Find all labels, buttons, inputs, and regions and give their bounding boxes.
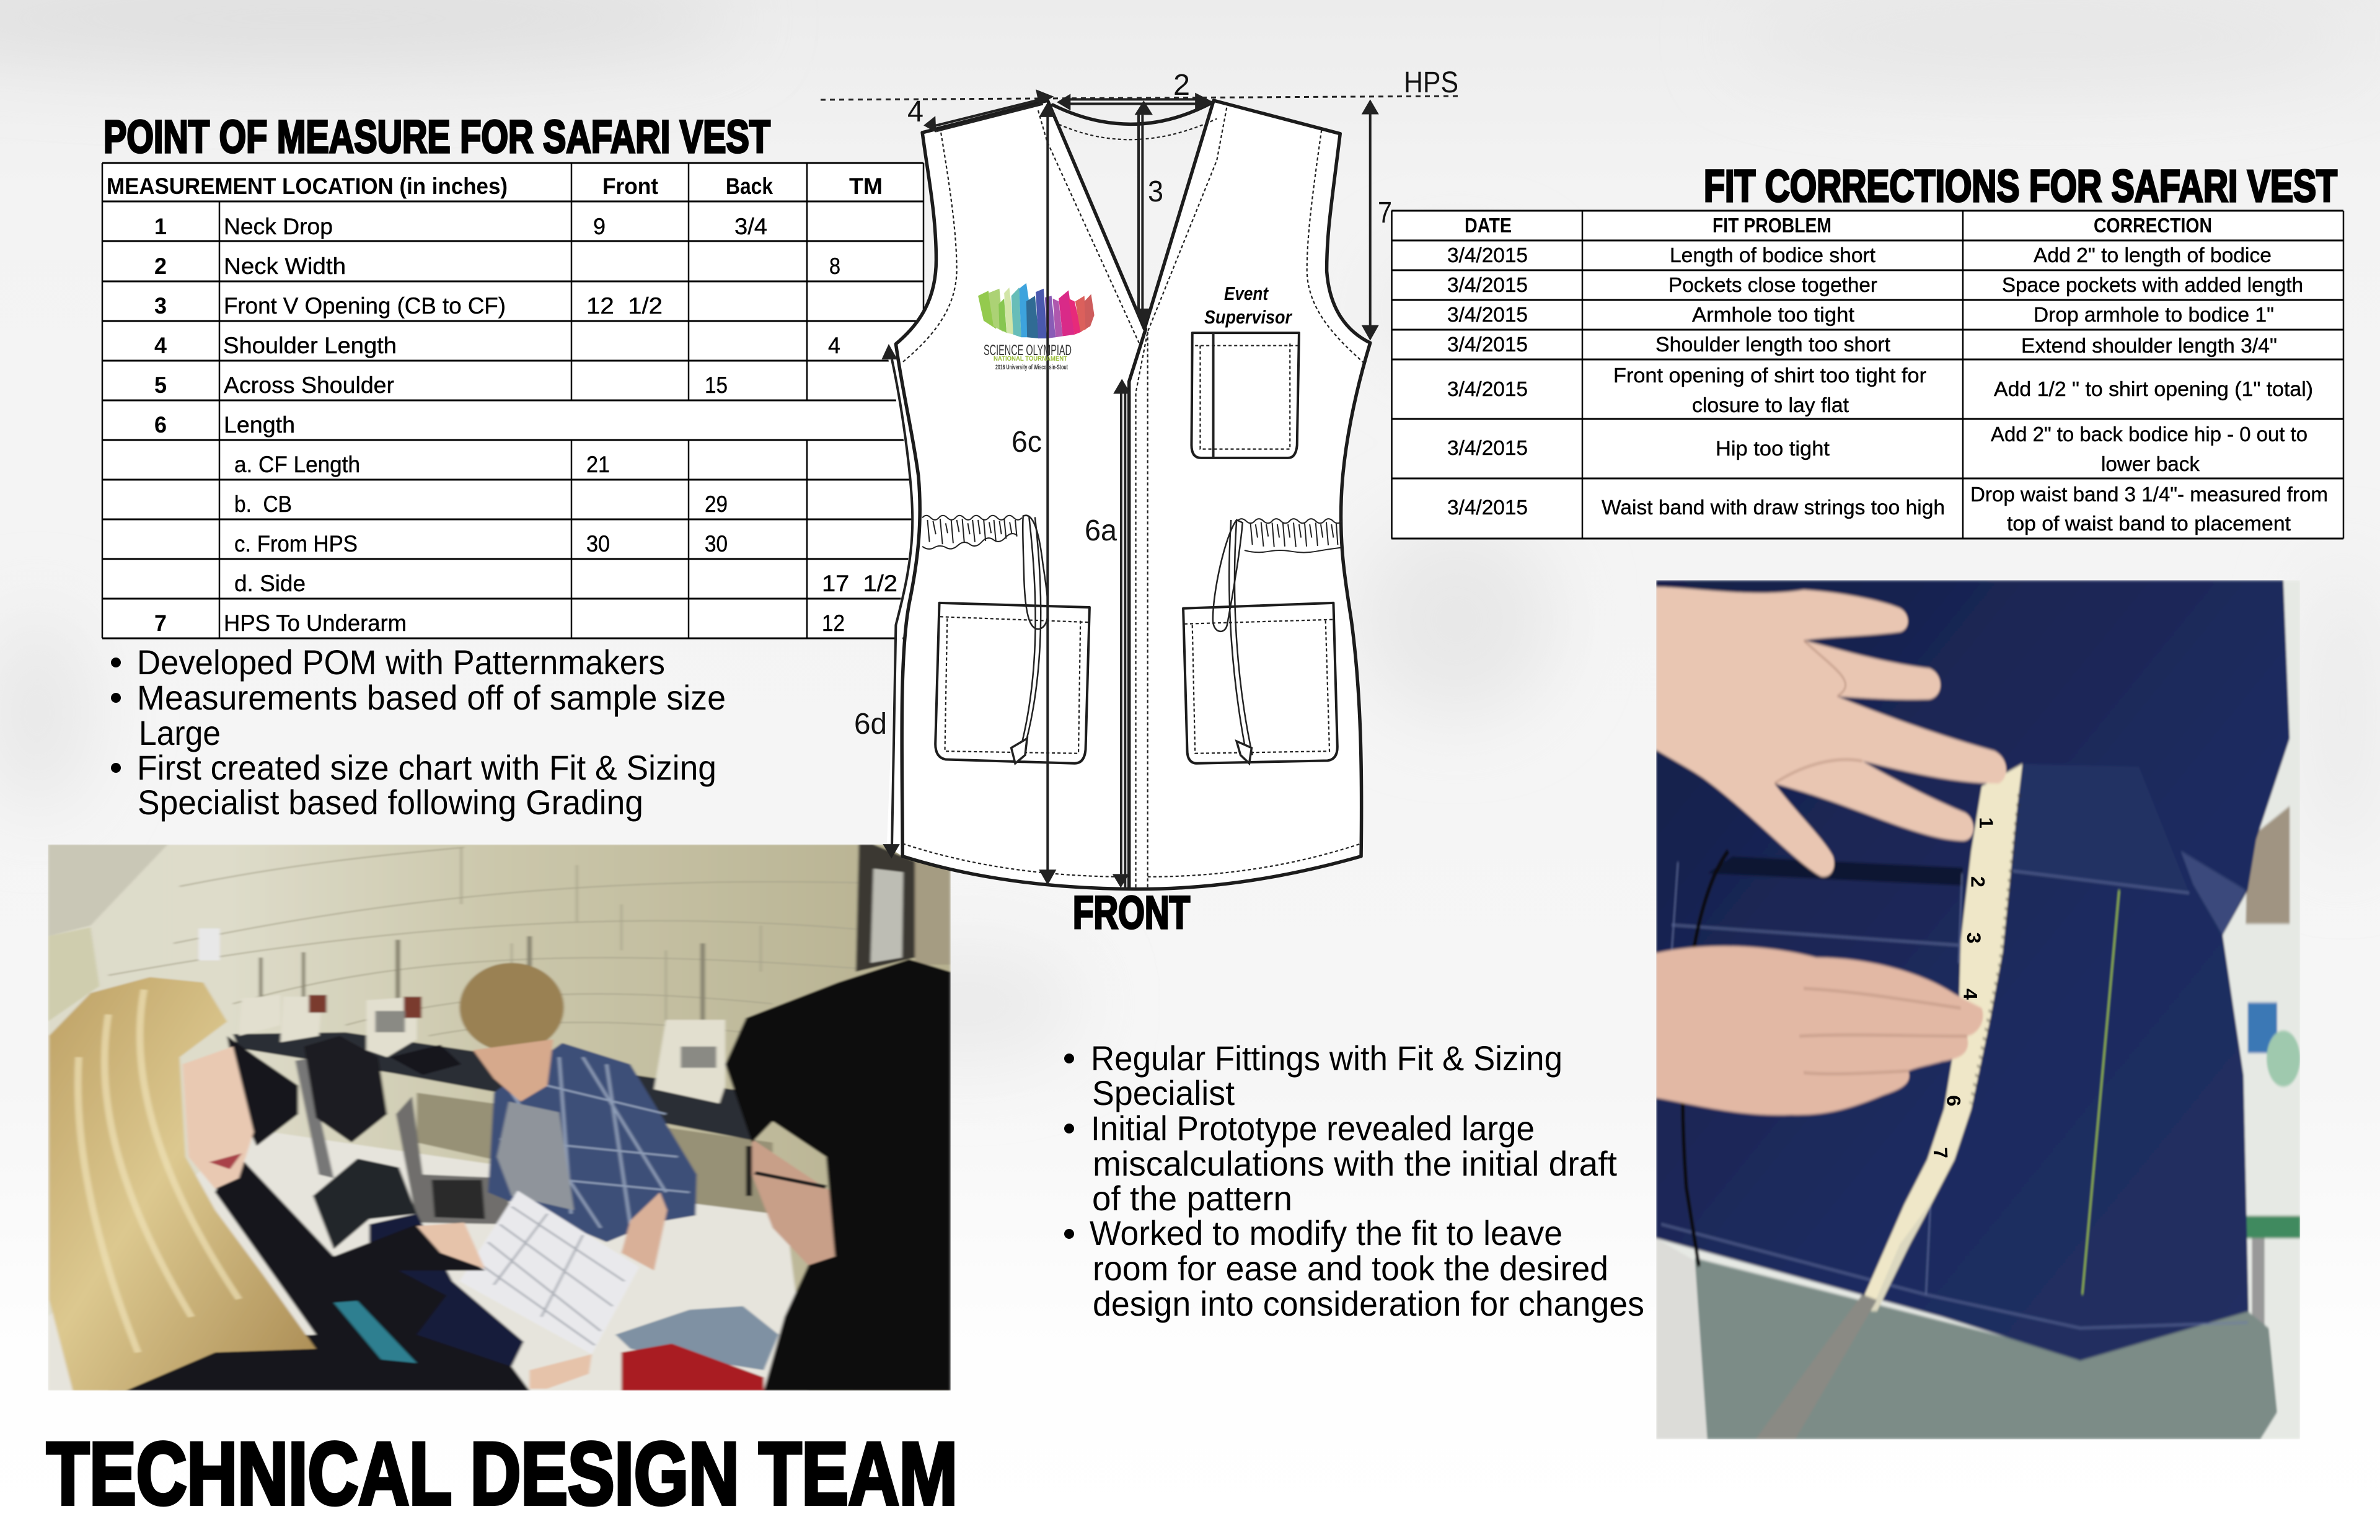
arrow 2: neck width	[1057, 93, 1214, 112]
fit table header: FIT PROBLEM	[1712, 214, 1831, 237]
table measurement names: Length	[224, 412, 295, 438]
table values: 12	[822, 610, 845, 636]
fit table corrections: lower back	[2101, 452, 2200, 475]
photo: team reviewing size chart	[48, 845, 951, 1391]
table header row: MEASUREMENT LOCATION (in inches)	[107, 174, 508, 199]
photo upper hand	[1656, 587, 2006, 877]
fit table corrections: Space pockets with added length	[2002, 273, 2303, 296]
photo: tape measure on vest: 4	[1959, 988, 1981, 1000]
photo floor	[48, 1129, 808, 1391]
fit table dates: 3/4/2015	[1447, 496, 1528, 519]
photo overlock machines	[239, 995, 725, 1103]
fit table corrections: Add 2" to length of bodice	[2034, 244, 2272, 266]
photo: tape measure on vest: 6	[1942, 1095, 1965, 1106]
fit table corrections: Add 1/2 " to shirt opening (1" total)	[1994, 377, 2313, 400]
text block: POM bullets: Specialist based following Grading	[138, 783, 643, 822]
vest label: Event Supervisor: Event	[1224, 283, 1269, 304]
measurement labels	[854, 66, 1458, 741]
fit table dates	[1447, 244, 1528, 519]
vest center front	[1129, 329, 1145, 889]
arrow 4: shoulder	[923, 89, 1054, 133]
fit table header	[1465, 214, 2212, 237]
text block: fitting bullets: design into consideration for changes	[1093, 1284, 1644, 1323]
table measurement names: Shoulder Length	[223, 333, 397, 358]
measurement labels: HPS	[1404, 66, 1458, 99]
fit table dates: 3/4/2015	[1447, 377, 1528, 400]
fit table corrections: Drop waist band 3 1/4"- measured from	[1970, 483, 2328, 506]
vest label: Event Supervisor	[1204, 283, 1293, 328]
table measurement names	[223, 214, 506, 636]
text block: fitting bullets: Specialist	[1092, 1073, 1235, 1112]
table row numbers: 2	[154, 253, 167, 279]
measurement labels: 6c	[1011, 426, 1042, 459]
logo text	[984, 342, 1072, 371]
measurement labels: 6d	[854, 708, 887, 741]
table values: 30	[705, 531, 728, 557]
fit table dates: 3/4/2015	[1447, 244, 1528, 266]
fit table problems: Armhole too tight	[1692, 303, 1854, 326]
measurement labels: 3	[1148, 175, 1163, 208]
text block: fitting bullets: Worked to modify the fit to leave	[1090, 1213, 1562, 1252]
fit table corrections: Add 2" to back bodice hip - 0 out to	[1991, 423, 2307, 446]
dashed HPS reference line	[821, 96, 1460, 100]
fit table dates: 3/4/2015	[1447, 273, 1528, 296]
table measurement names: c. From HPS	[234, 531, 358, 557]
fit table dates: 3/4/2015	[1447, 436, 1528, 459]
label: FRONT: FRONT	[1073, 887, 1190, 938]
arrow 6a: CF length	[1113, 379, 1130, 889]
fit table problems: Hip too tight	[1716, 437, 1830, 460]
fit table dates: 3/4/2015	[1447, 303, 1528, 326]
table values: 8	[829, 253, 840, 279]
table measurement names: Neck Drop	[224, 214, 333, 239]
measurement labels: 7	[1378, 196, 1392, 229]
photo middle person	[488, 1043, 697, 1242]
table values: 30	[586, 531, 610, 557]
side measurement white cover	[887, 344, 924, 856]
photo dark-haired person	[752, 1139, 835, 1265]
table: point of measure	[102, 163, 923, 638]
vest neckline	[1053, 102, 1213, 124]
photo navy vest	[1656, 580, 2290, 1361]
table measurement names: a. CF Length	[234, 452, 360, 477]
table values: 29	[705, 491, 728, 517]
text block: fitting bullets: room for ease and took the desired	[1093, 1249, 1608, 1288]
text block: fitting bullets: Regular Fittings with Fit & Sizing	[1091, 1039, 1562, 1078]
table values: 9	[593, 214, 606, 239]
photo background objects	[2244, 806, 2300, 1350]
table header row: TM	[849, 174, 883, 199]
text block: fitting bullets: of the pattern	[1092, 1179, 1292, 1218]
table measurement names: Neck Width	[224, 253, 346, 279]
logo text: 2016 University of Wisconsin-Stout	[995, 364, 1068, 371]
measurement labels: 2	[1173, 69, 1190, 102]
fit table problems: Front opening of shirt too tight for	[1613, 364, 1926, 387]
fit table problems: Pockets close together	[1668, 273, 1877, 296]
right waistband	[1237, 519, 1342, 553]
logo: Science Olympiad crown	[978, 283, 1095, 338]
photo tape measure	[1862, 764, 2022, 1306]
table values: 3/4	[734, 214, 767, 239]
table row numbers: 1	[154, 214, 167, 239]
logo text: NATIONAL TOURNAMENT	[994, 355, 1067, 363]
table: fit corrections	[1391, 211, 2343, 539]
photo: tape measure on vest: 1	[1975, 817, 1998, 829]
table header row	[107, 174, 883, 199]
text block: POM bullets	[111, 643, 726, 822]
text block: fitting bullets: Initial Prototype revealed large	[1091, 1109, 1535, 1148]
table values: 4	[828, 333, 840, 358]
photo grey trousers	[1695, 1258, 2277, 1439]
table measurement names: Front V Opening (CB to CF)	[224, 293, 506, 319]
fit table problems: Shoulder length too short	[1655, 333, 1890, 356]
logo text: SCIENCE OLYMPIAD	[984, 342, 1072, 359]
text block: POM bullets: First created size chart with Fit & Sizing	[137, 748, 716, 787]
table measurement names: Across Shoulder	[224, 372, 394, 398]
arrow 3: neck drop	[1135, 100, 1153, 327]
table row numbers: 7	[154, 610, 167, 636]
table row numbers: 5	[154, 372, 167, 398]
arrow 6c: from HPS	[1039, 102, 1056, 885]
table row numbers: 4	[154, 333, 167, 358]
fit table corrections	[1970, 244, 2328, 535]
text block: POM bullets: Measurements based off of sample size	[137, 678, 726, 717]
table measurement names: HPS To Underarm	[224, 610, 407, 636]
arrow 6d: side length	[881, 344, 912, 858]
fit table corrections: top of waist band to placement	[2007, 512, 2291, 535]
vest label: Event Supervisor: Supervisor	[1204, 306, 1293, 328]
table values: 12 1/2	[586, 293, 663, 319]
table measurement names: d. Side	[234, 571, 306, 596]
photo: tape measure on vest: 7	[1929, 1146, 1952, 1160]
photo cinderblock lines	[108, 847, 862, 1036]
fit table corrections: Extend shoulder length 3/4"	[2021, 334, 2277, 357]
table header row: Back	[726, 174, 773, 199]
diagram: safari vest front with points of measure	[881, 89, 1379, 889]
photo bag and red item	[615, 1306, 778, 1370]
table values: 17 1/2	[822, 571, 897, 596]
right lower pocket	[1183, 603, 1338, 763]
text block: fitting bullets	[1064, 1039, 1644, 1323]
left lower pocket	[935, 603, 1090, 763]
table values	[586, 214, 897, 636]
text block: POM bullets: Large	[139, 713, 221, 752]
table measurement names: b. CB	[234, 491, 292, 517]
measurement labels: 6a	[1085, 514, 1117, 547]
table values: 21	[586, 452, 610, 477]
fit table problems	[1602, 244, 1945, 519]
fit table corrections: Drop armhole to bodice 1"	[2034, 303, 2274, 326]
photo: tape measure on vest: 3	[1963, 932, 1985, 944]
fit table header: CORRECTION	[2094, 214, 2212, 237]
table row numbers	[154, 214, 167, 636]
vest topstitching	[902, 108, 1363, 889]
table header row: Front	[602, 174, 658, 199]
heading: point of measure: POINT OF MEASURE FOR SAFARI VEST	[104, 111, 770, 162]
fit table header: DATE	[1465, 214, 1512, 237]
table row numbers: 6	[154, 412, 167, 438]
table row numbers: 3	[154, 293, 167, 319]
fit table problems: Waist band with draw strings too high	[1602, 496, 1945, 519]
photo paper	[459, 1190, 639, 1354]
measurement labels: 4	[907, 95, 923, 128]
fit table dates: 3/4/2015	[1447, 333, 1528, 356]
fit table problems: Length of bodice short	[1670, 244, 1875, 266]
photo lower hand	[1656, 946, 1983, 1115]
vest body outline	[896, 100, 1370, 889]
arrow 7: HPS to underarm	[1362, 99, 1379, 341]
breast pocket	[1191, 333, 1299, 458]
photo: tape measure on vest	[1656, 580, 2300, 1439]
left drawstring	[1011, 516, 1048, 763]
table values: 15	[705, 372, 728, 398]
photo: tape measure on vest: 2	[1967, 876, 1989, 887]
right drawstring	[1213, 520, 1253, 763]
fit table problems: closure to lay flat	[1692, 394, 1849, 416]
photo blonde person	[369, 1213, 524, 1391]
text block: fitting bullets: miscalculations with the initial draft	[1093, 1144, 1617, 1183]
title: technical design team: TECHNICAL DESIGN TEAM	[46, 1425, 958, 1523]
left waistband	[922, 516, 1022, 549]
text block: POM bullets: Developed POM with Patternmakers	[137, 643, 665, 682]
